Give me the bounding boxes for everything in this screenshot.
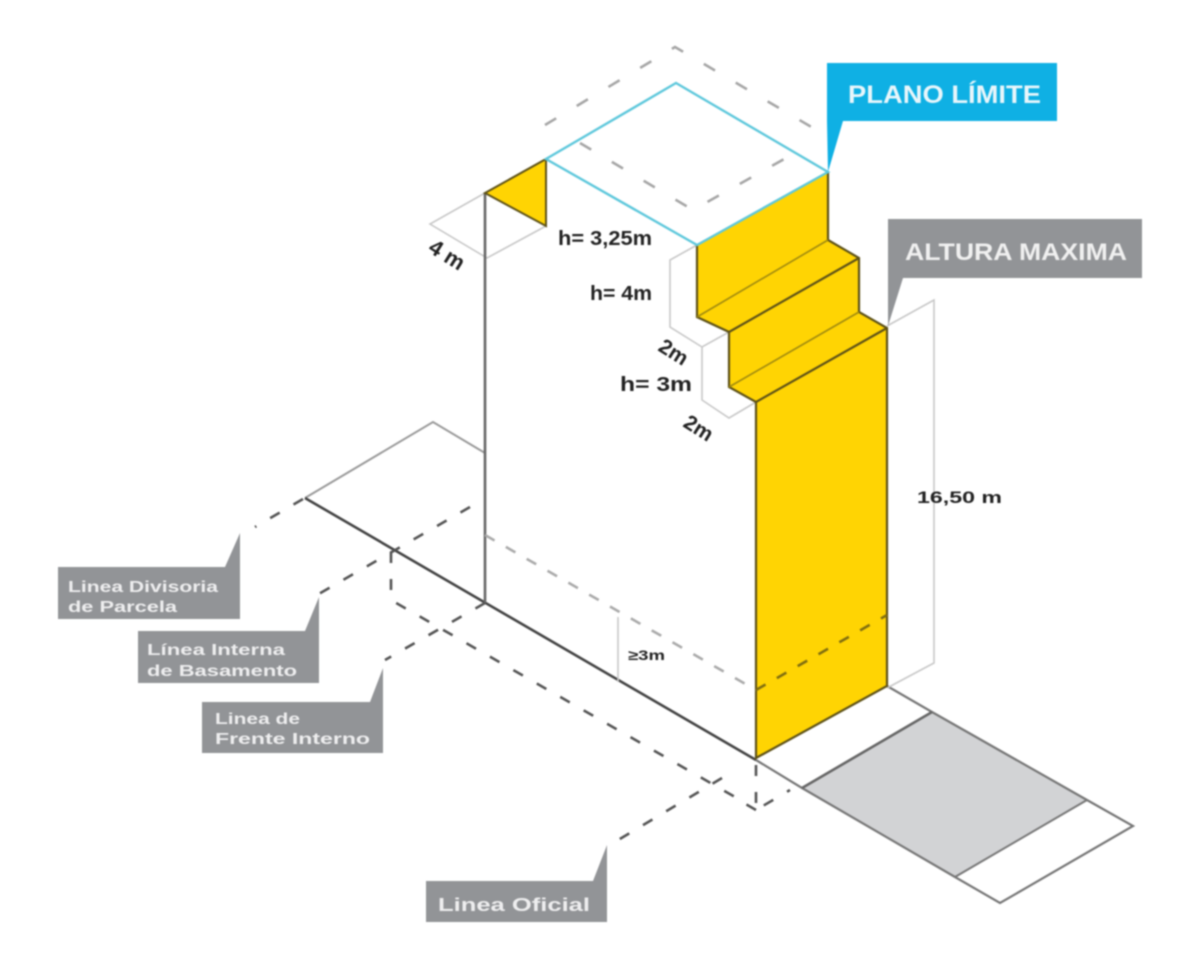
light dimension guide lines [430, 193, 934, 688]
callout: linea oficial [426, 845, 607, 922]
callout: linea interna de basamento [138, 597, 319, 683]
sidewalk and street strip [756, 686, 1133, 903]
callout: altura maxima: ALTURA MAXIMA [905, 239, 1127, 266]
callout: plano limite: PLANO LÍMITE [848, 80, 1041, 109]
callout: linea de frente interno [202, 668, 383, 753]
dashed roof projection [545, 47, 825, 210]
yellow triangle on party wall [485, 159, 546, 226]
dimension label: 16,50 m: 16,50 m [917, 488, 1002, 507]
dimension label: h= 3m: h= 3m [620, 374, 692, 396]
callout: linea de frente interno: Linea de [215, 711, 300, 728]
dimension label: 4 m: 4 m [424, 234, 470, 275]
dimension label: h= 3,25m: h= 3,25m [558, 228, 652, 250]
callout: altura maxima [888, 219, 1142, 326]
callout: linea divisoria de parcela: Linea Divisoria [68, 579, 218, 596]
callout: linea interna de basamento: de Basamento [147, 663, 297, 680]
callout: linea divisoria de parcela [58, 533, 240, 619]
dashed ground lines [255, 499, 790, 846]
callout: plano limite [827, 63, 1057, 172]
ground plot outline [305, 422, 756, 760]
dimension label: 3m minimum: ≥3m [628, 647, 665, 663]
dashed basement line on wall [485, 535, 887, 690]
building side wall line [484, 193, 486, 603]
dimension label: 2m lower: 2m [679, 411, 717, 446]
yellow facade with setbacks [697, 172, 887, 758]
callout: linea interna de basamento: Línea Interna [147, 642, 285, 659]
callout: linea divisoria de parcela: de Parcela [68, 599, 177, 616]
callout: linea de frente interno: Frente Interno [215, 731, 370, 748]
callout: linea oficial: Linea Oficial [438, 895, 590, 915]
plano limite cyan outline [546, 83, 828, 245]
dimension label: 2m upper: 2m [654, 335, 692, 370]
dimension label: h= 4m: h= 4m [590, 283, 652, 305]
